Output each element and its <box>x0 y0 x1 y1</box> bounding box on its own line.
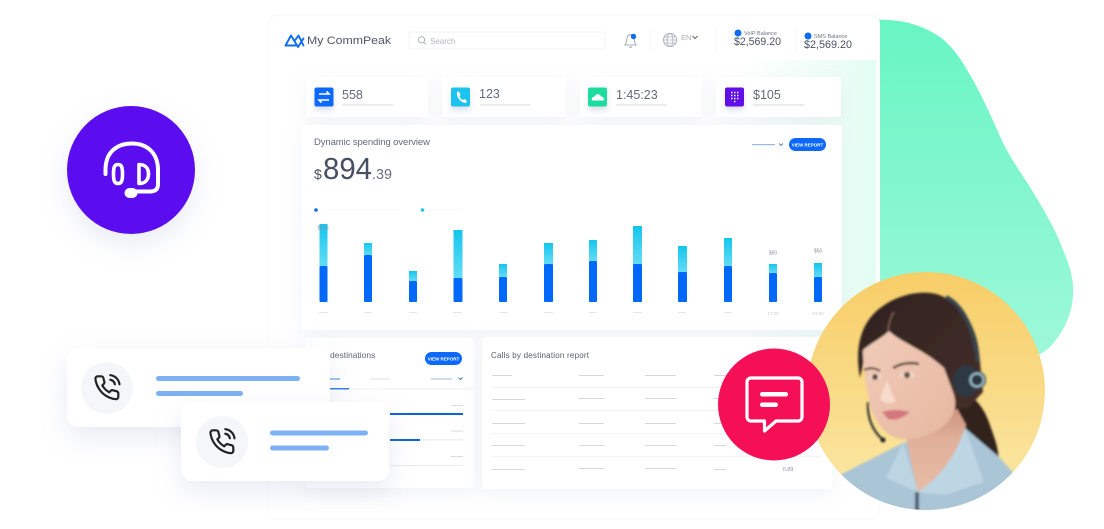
SMS balance: SMS Balance <box>814 34 847 40</box>
SMS balance <box>804 32 852 51</box>
call card: front <box>181 402 389 481</box>
x axis labels <box>319 311 824 316</box>
button: view report: VIEW REPORT <box>428 356 459 362</box>
stat card: 1:45:23 <box>580 77 702 117</box>
stat card: $105 <box>716 77 841 117</box>
x axis labels: 17:00 <box>767 311 779 316</box>
bar value labels: $50 <box>769 250 777 256</box>
call card: back <box>67 348 330 427</box>
placeholder lines <box>156 376 300 396</box>
SMS balance: $2,569.20 <box>804 39 852 51</box>
button: view report: VIEW REPORT <box>792 142 823 148</box>
panel: dynamic spending overview <box>302 125 842 330</box>
search box <box>409 32 605 49</box>
button: view report <box>425 352 462 365</box>
icon: notification bell <box>625 34 636 48</box>
VoIP balance: $2,569.20 <box>734 36 781 48</box>
heading: calls by destination: Calls by destination report <box>491 351 590 360</box>
icon: transfer arrows <box>314 88 334 106</box>
background blob <box>872 20 1073 362</box>
stat card: 123: 123 <box>479 87 500 101</box>
panel: calls by destination report <box>482 337 832 489</box>
chart legend <box>314 208 463 212</box>
bar value labels: $50 <box>814 248 822 254</box>
language selector: EN <box>681 33 691 42</box>
icon: phone <box>451 88 470 106</box>
icon: phone call <box>196 416 248 468</box>
panel: top destinations <box>305 338 474 488</box>
tabs <box>330 378 474 390</box>
total amount: .39 <box>372 166 392 183</box>
agent portrait <box>807 272 1045 520</box>
report table <box>492 376 820 473</box>
bar value labels <box>317 226 822 256</box>
total amount <box>314 151 392 186</box>
search box: Search <box>430 37 455 46</box>
icon: purple headset badge <box>67 106 195 234</box>
button: view report <box>789 138 826 151</box>
heading: dynamic spending: Dynamic spending overview <box>314 137 430 148</box>
report table: 0.89 <box>783 467 793 473</box>
bar value labels: $150 <box>317 226 329 232</box>
placeholder lines <box>270 430 368 450</box>
icon: pink message badge <box>718 348 830 460</box>
progress rows <box>390 405 463 466</box>
stat card: $105: $105 <box>753 88 781 102</box>
icon: phone call <box>81 362 133 414</box>
total amount: $ <box>314 166 322 182</box>
stat card: 558 <box>306 77 428 117</box>
stat card: 1:45:23: 1:45:23 <box>616 88 658 102</box>
header logo: My CommPeak <box>307 35 392 47</box>
period selector <box>752 144 783 146</box>
stat card: 558: 558 <box>342 88 363 102</box>
icon: keypad <box>725 88 744 106</box>
heading: destinations: destinations <box>330 350 375 360</box>
VoIP balance <box>734 30 781 48</box>
language selector <box>664 33 698 46</box>
dashboard panel <box>268 15 880 520</box>
stacked bar chart <box>320 224 822 302</box>
stat card: 123 <box>442 77 566 117</box>
VoIP balance: VoIP Balance <box>744 31 777 37</box>
x axis labels: 21:00 <box>812 311 824 316</box>
icon: cloud <box>588 88 607 106</box>
total amount: 894 <box>323 151 372 186</box>
